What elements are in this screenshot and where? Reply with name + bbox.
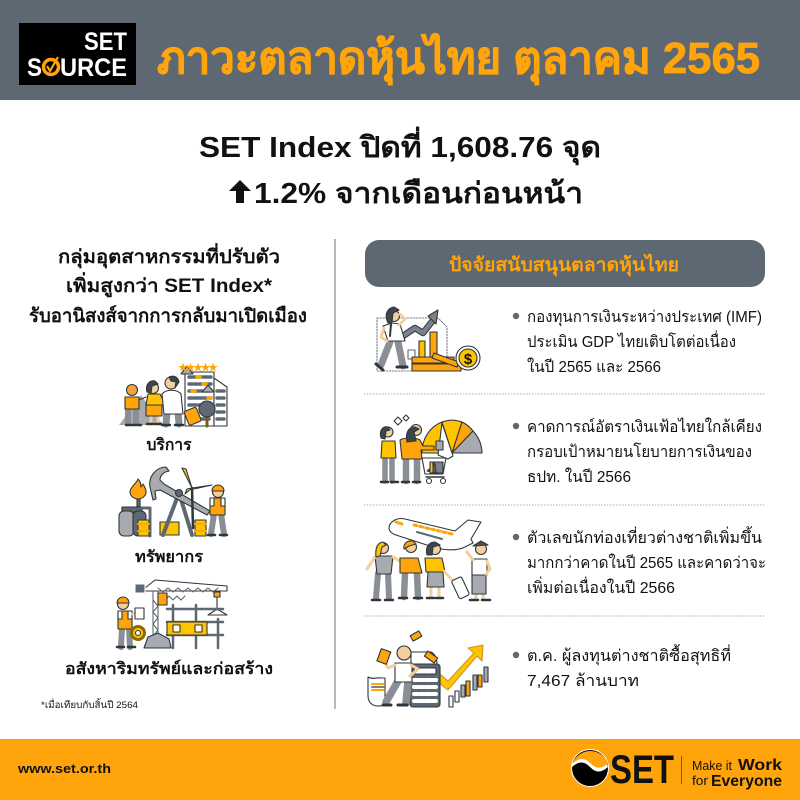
icon: services: ★★★★★ (178, 363, 218, 374)
footnote: *เมื่อเทียบกับสิ้นปี 2564 (41, 698, 138, 711)
label: real estate and construction: อสังหาริมทรัพย์และก่อสร้าง (65, 659, 273, 678)
header band (0, 0, 800, 100)
icon: tourism (367, 519, 490, 600)
text: IMF: กองทุนการเงินระหว่างประเทศ (IMF) (527, 309, 762, 327)
logo: SET: for (692, 773, 709, 788)
heading: left panel (29, 243, 307, 327)
label: resources: ทรัพยากร (135, 548, 203, 566)
logo: SET: Everyone (711, 773, 782, 790)
logo: SET SOURCE (19, 23, 136, 85)
headline: SET Index: 1.2% จากเดือนก่อนหน้า (254, 178, 583, 210)
panel heading: supporting factors (365, 240, 765, 287)
heading: left panel: กลุ่มอุตสาหกรรมที่ปรับตัว (58, 243, 280, 269)
icon: resources (119, 467, 227, 536)
label: services: บริการ (146, 436, 192, 454)
text: tourism (513, 526, 766, 597)
website: www.set.or.th (17, 762, 111, 776)
icon: IMF growth: $ (464, 351, 473, 368)
text: tourism: มากกว่าคาดในปี 2565 และคาดว่าจะ (527, 553, 766, 572)
icon: foreign investors (368, 631, 488, 707)
logo: SET: Make it (692, 758, 732, 773)
text: inflation: ธปท. ในปี 2566 (527, 467, 631, 486)
arrow up (229, 180, 251, 203)
text: IMF: ในปี 2565 และ 2566 (527, 357, 661, 376)
logo: SET SOURCE: SET (84, 28, 127, 56)
text: tourism: ตัวเลขนักท่องเที่ยวต่างชาติเพิ่มขึ้น (527, 526, 762, 547)
text: tourism: เพิ่มต่อเนื่องในปี 2566 (527, 576, 675, 597)
logo: SET (572, 748, 782, 792)
heading: left panel: เพิ่มสูงกว่า SET Index* (66, 272, 273, 298)
icon: IMF growth (376, 307, 480, 371)
text: inflation: กรอบเป้าหมายนโยบายการเงินของ (527, 442, 752, 461)
logo: SET SOURCE: URCE (60, 54, 127, 82)
text: foreign investors: 7,467 ล้านบาท (527, 672, 639, 690)
icon: services (119, 363, 227, 426)
icon: real estate and construction (117, 580, 227, 648)
footer band (0, 739, 800, 800)
icon: inflation gauge (380, 415, 482, 484)
logo: SET: SET (610, 748, 674, 792)
text: inflation (513, 417, 762, 486)
text: inflation: คาดการณ์อัตราเงินเฟ้อไทยใกล้เคียง (527, 417, 762, 436)
logo: SET: Work (738, 757, 782, 774)
heading: left panel: รับอานิสงส์จากการกลับมาเปิดเมือง (29, 305, 307, 327)
divider (334, 239, 336, 709)
logo: SET SOURCE: S (27, 54, 42, 82)
text: IMF (513, 309, 762, 376)
headline: SET Index: SET Index ปิดที่ 1,608.76 จุด (199, 126, 601, 165)
text: IMF: ประเมิน GDP ไทยเติบโตต่อเนื่อง (527, 330, 736, 351)
title: ภาวะตลาดหุ้นไทย ตุลาคม 2565 (157, 32, 760, 86)
text: foreign investors (513, 644, 731, 690)
panel heading: supporting factors: ปัจจัยสนับสนุนตลาดหุ้นไทย (449, 253, 679, 277)
text: foreign investors: ต.ค. ผู้ลงทุนต่างชาติซื้อสุทธิที่ (527, 644, 731, 666)
headline: SET Index (199, 126, 601, 210)
